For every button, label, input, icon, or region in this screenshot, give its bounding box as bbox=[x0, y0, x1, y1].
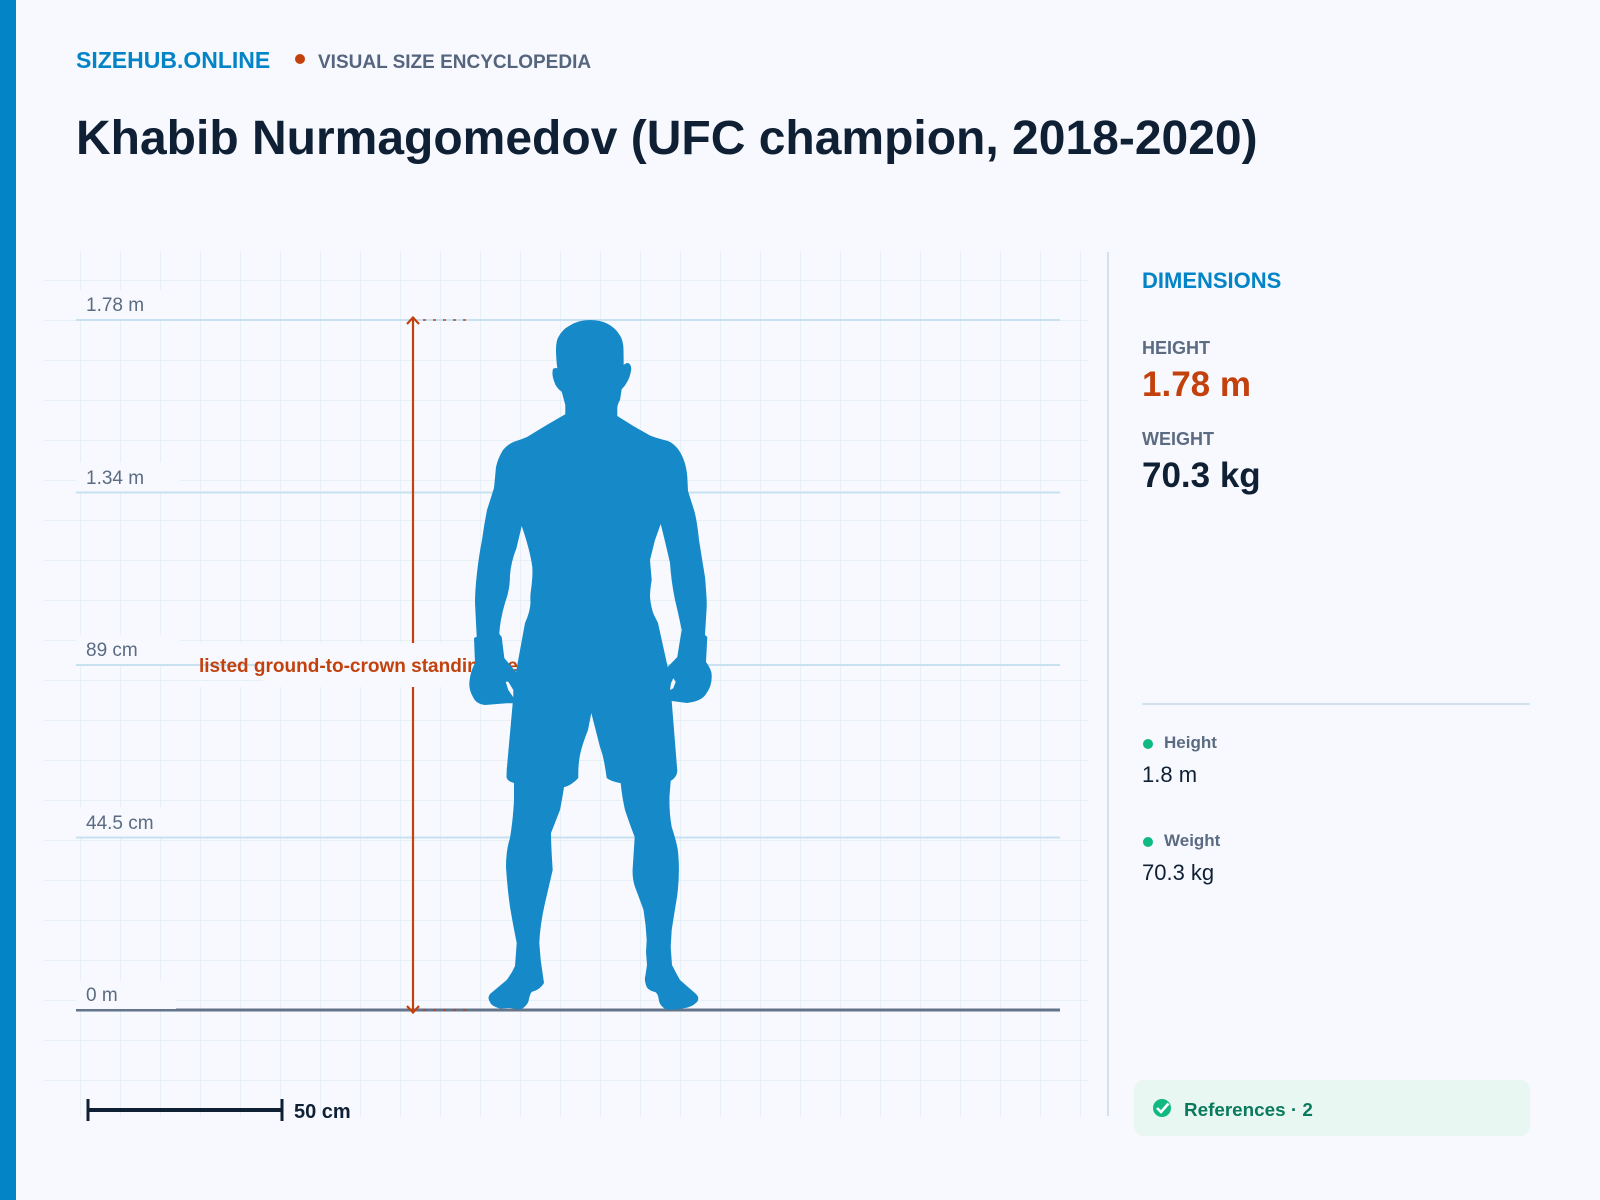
callout label: listed ground-to-crown standing height bbox=[199, 656, 553, 677]
scale label: 50 cm bbox=[294, 1101, 351, 1123]
header dot bbox=[295, 54, 305, 64]
verified item: weight: 70.3 kg bbox=[1142, 860, 1214, 885]
verified item: weight bbox=[1142, 831, 1221, 885]
sidebar heading: DIMENSIONS bbox=[1142, 268, 1281, 293]
ground line bbox=[76, 1008, 1060, 1012]
height arrow bbox=[407, 318, 468, 1012]
height label: HEIGHT bbox=[1142, 338, 1210, 358]
brand name: SIZEHUB.ONLINE bbox=[76, 47, 270, 73]
verified item: height: 1.8 m bbox=[1142, 762, 1197, 787]
tick label: 1.78 m: 1.78 m bbox=[86, 295, 144, 316]
verified item: height bbox=[1142, 733, 1217, 787]
verified item: height: Height bbox=[1164, 733, 1217, 752]
tick label: 89 cm: 89 cm bbox=[86, 640, 138, 661]
tagline: VISUAL SIZE ENCYCLOPEDIA bbox=[318, 52, 591, 73]
header bbox=[76, 47, 1258, 165]
verified item: weight: Weight bbox=[1164, 831, 1221, 850]
tick label: 1.34 m: 1.34 m bbox=[86, 468, 144, 489]
panel: dimensions sidebar bbox=[1107, 252, 1530, 1136]
height value: 1.78 m bbox=[1142, 365, 1251, 404]
panel: size chart bbox=[44, 252, 1088, 1123]
weight value: 70.3 kg bbox=[1142, 456, 1261, 495]
icon: check bbox=[1153, 1099, 1171, 1117]
tick label: 44.5 cm: 44.5 cm bbox=[86, 813, 154, 834]
references badge bbox=[1134, 1080, 1530, 1136]
tick label: 0 m: 0 m bbox=[86, 985, 118, 1006]
silhouette: standing figure bbox=[469, 320, 712, 1010]
scale bar bbox=[88, 1099, 351, 1123]
references badge: References · 2 bbox=[1184, 1099, 1313, 1120]
title: Khabib Nurmagomedov (UFC champion, 2018-2020) bbox=[76, 112, 1258, 165]
accent stripe bbox=[0, 0, 16, 1200]
weight label: WEIGHT bbox=[1142, 429, 1214, 449]
